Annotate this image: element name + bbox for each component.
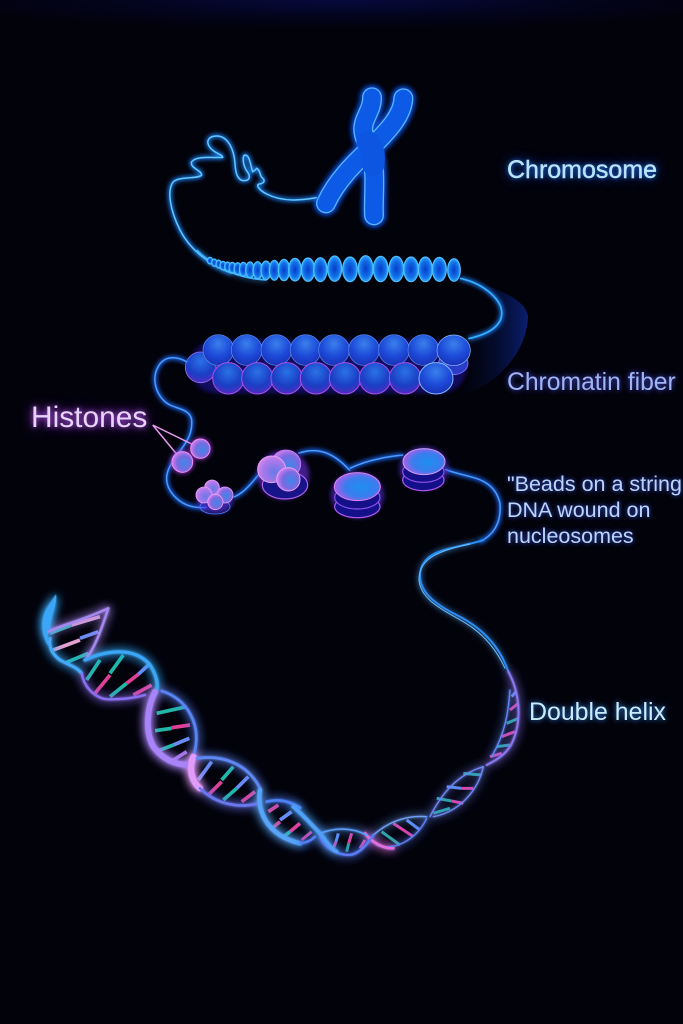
label: beads on a string: nucleosomes — [507, 524, 634, 548]
linker DNA — [155, 358, 500, 542]
helix strands, lower right — [430, 767, 483, 817]
helix strands — [42, 594, 300, 843]
stacked disc nucleosome B — [399, 446, 449, 491]
double helix, upper left half — [42, 594, 300, 843]
label: Chromosome: Chromosome — [507, 156, 657, 184]
label: Double helix: Double helix — [529, 698, 666, 726]
double helix, lower right half and tail — [293, 540, 519, 855]
open nucleosome — [257, 450, 309, 500]
chromosome and its unravelling thread — [170, 97, 528, 398]
chromatin fibre glow — [190, 340, 467, 393]
stacked disc nucleosome A — [331, 472, 384, 518]
fan shadow behind tail — [453, 278, 528, 398]
helix strands, far right — [487, 672, 519, 765]
helix end ribbon — [42, 594, 108, 673]
base pair rungs — [50, 617, 300, 838]
coiled bead row — [207, 256, 460, 282]
helix strands, bottom — [320, 816, 427, 855]
chromatin fibre: top row — [203, 335, 470, 366]
label: beads on a string — [504, 472, 683, 548]
chromatin fibre: bottom row — [213, 363, 453, 394]
base pair rungs — [302, 692, 518, 852]
chromatin fibre: back row — [185, 352, 468, 383]
cyan underline of coil — [197, 250, 267, 280]
label: beads on a string: "Beads on a string — [507, 472, 682, 496]
free histone pair — [170, 437, 212, 474]
label: Histones: Histones — [31, 401, 147, 434]
nucleosomes and histones — [153, 358, 500, 542]
label: beads on a string: DNA wound on — [507, 498, 650, 522]
upper tail ribbon — [419, 540, 508, 672]
thread line — [170, 136, 317, 273]
helix strands — [293, 672, 519, 855]
helix crossing loop 3 — [191, 757, 260, 805]
coiled bead row glow — [260, 238, 455, 304]
icon: chromosome X — [326, 97, 403, 215]
helix strands, bottom-left — [293, 807, 337, 852]
histone octamer cluster — [196, 480, 233, 514]
histone pointer lines — [153, 425, 192, 453]
label: Chromatin fiber: Chromatin fiber — [507, 369, 676, 396]
linker DNA glow — [155, 358, 500, 542]
thread glow — [170, 136, 317, 273]
helix crossing loop 2 — [148, 691, 196, 765]
helix crossing loop 1 — [82, 652, 157, 699]
helix crossing loop 4 — [259, 790, 300, 843]
tail connecting bead row to fibre — [460, 278, 502, 339]
